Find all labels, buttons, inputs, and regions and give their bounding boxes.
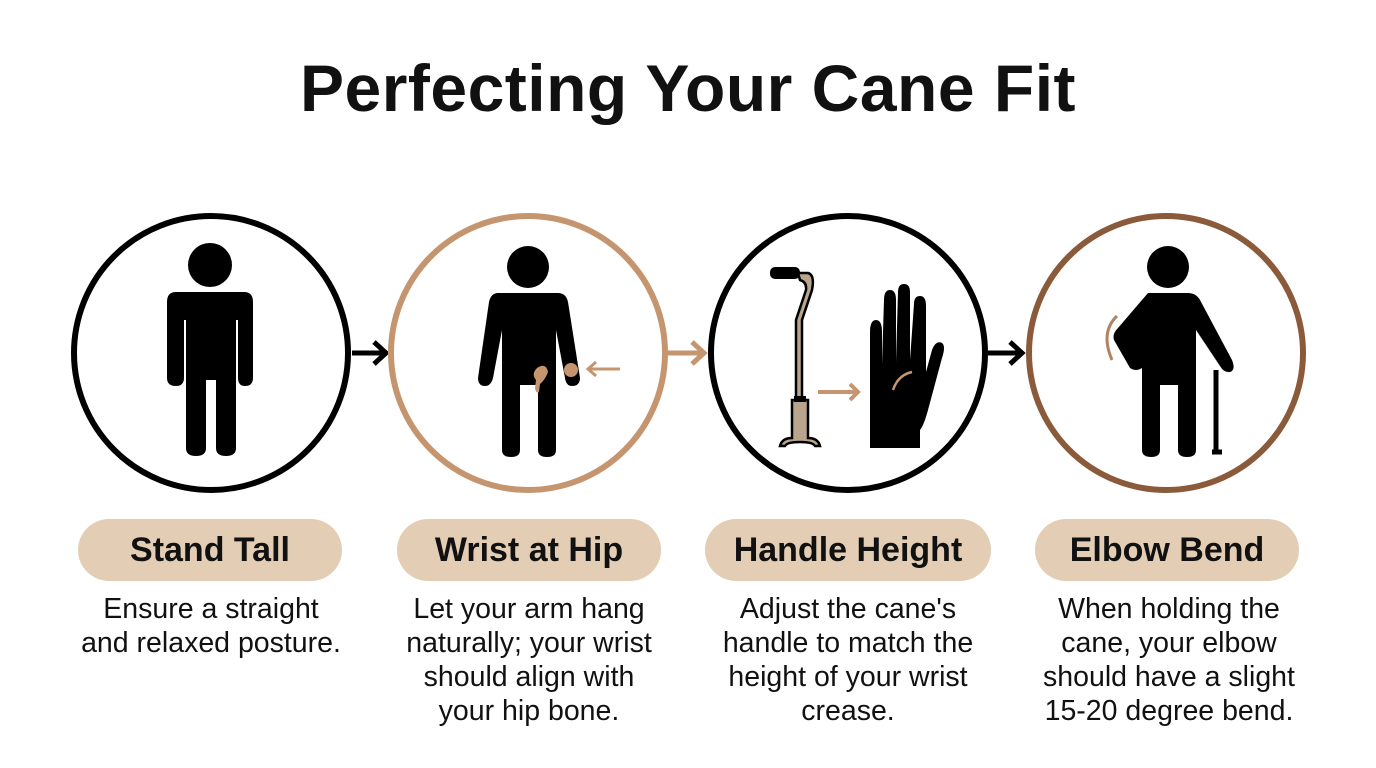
step 2 circle [391, 216, 665, 490]
arrow 3 [988, 342, 1022, 364]
text: step 3: height of your wrist [728, 661, 968, 693]
pill: Elbow Bend [1035, 519, 1299, 581]
text: step 4 [1043, 593, 1295, 727]
text: step 2: should align with [424, 661, 634, 693]
text: step 1: and relaxed posture. [81, 627, 341, 659]
text: step 4: When holding the [1058, 593, 1280, 625]
pill: Handle Height: Handle Height [734, 531, 962, 569]
text: step 1 [81, 593, 341, 659]
text: step 3: handle to match the [723, 627, 973, 659]
text: step 3: Adjust the cane's [740, 593, 956, 625]
text: step 4: 15-20 degree bend. [1045, 695, 1293, 727]
text: step 1: Ensure a straight [103, 593, 319, 625]
pill: Elbow Bend: Elbow Bend [1070, 531, 1264, 569]
text: step 4: cane, your elbow [1061, 627, 1277, 659]
step 4 circle [1029, 216, 1303, 490]
pill: Wrist at Hip [397, 519, 661, 581]
arrow 1 [352, 342, 386, 364]
text: step 3: crease. [801, 695, 895, 727]
pill: Handle Height [705, 519, 991, 581]
text: step 2: Let your arm hang [413, 593, 645, 625]
pill: Stand Tall [78, 519, 342, 581]
pill: Wrist at Hip: Wrist at Hip [435, 531, 623, 569]
step 1 circle [74, 216, 348, 490]
text: step 3 [723, 593, 973, 727]
text: step 2: naturally; your wrist [406, 627, 652, 659]
arrow 2 [668, 342, 704, 364]
pill: Stand Tall: Stand Tall [130, 531, 290, 569]
text: step 2 [406, 593, 652, 727]
title: Perfecting Your Cane Fit [300, 51, 1076, 125]
text: step 2: your hip bone. [439, 695, 619, 727]
text: step 4: should have a slight [1043, 661, 1295, 693]
step 3 circle [711, 216, 985, 490]
